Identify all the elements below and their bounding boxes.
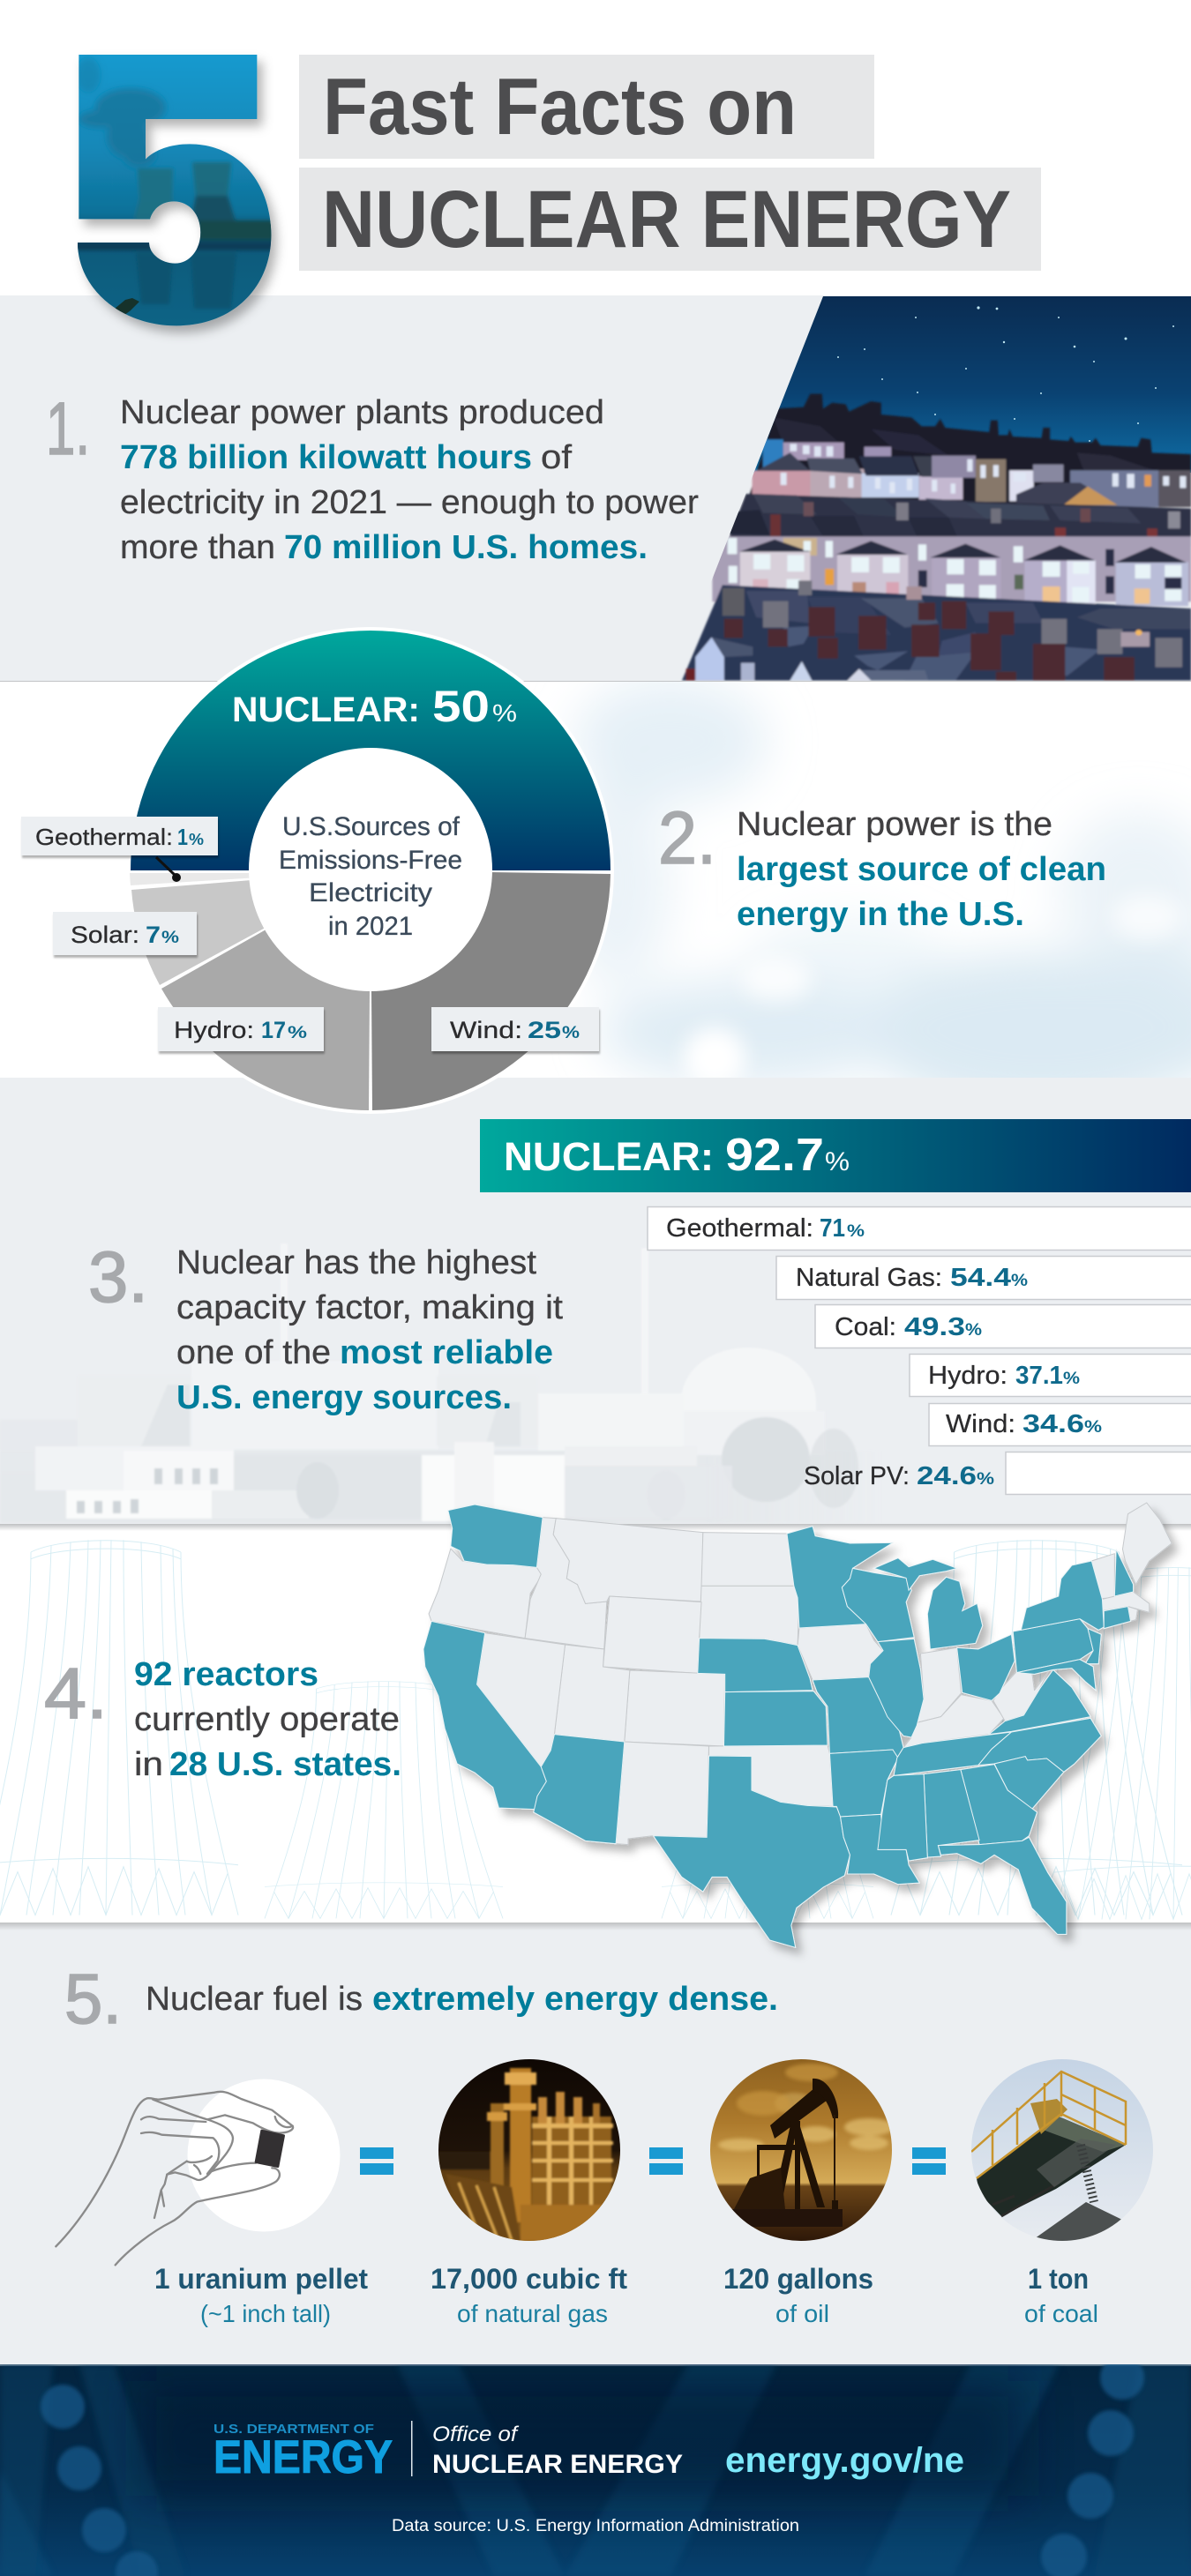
bar: wind: % xyxy=(1084,1418,1102,1437)
bar: hydro: Hydro: xyxy=(928,1362,1007,1390)
bar: natural gas xyxy=(776,1256,1191,1300)
donut centre label: Emissions-Free xyxy=(279,846,462,875)
states with operating reactors xyxy=(423,1505,1134,1947)
donut centre label: U.S.Sources of xyxy=(282,812,461,841)
fact 1 body: 778 billion kilowatt hours xyxy=(120,439,532,476)
bar: geothermal: % xyxy=(847,1222,865,1241)
bar: coal xyxy=(815,1305,1191,1348)
label: wind: 25 xyxy=(528,1017,561,1043)
equals sign 2 xyxy=(649,2147,683,2175)
bar: hydro: % xyxy=(1063,1370,1080,1388)
label: geothermal: Geothermal: xyxy=(35,824,173,850)
section divider shadow xyxy=(0,1923,1191,1930)
bar: solar PV xyxy=(804,1452,1191,1494)
nuclear label: 50 xyxy=(432,682,490,731)
label: geothermal xyxy=(21,817,218,855)
caption: coal xyxy=(1024,2263,1098,2327)
fact 5 heading: Nuclear fuel is xyxy=(146,1981,363,2018)
label: solar: Solar: xyxy=(71,922,139,948)
nuclear label xyxy=(232,682,517,731)
nuclear label: NUCLEAR: xyxy=(232,691,420,729)
slice: wind 25 percent xyxy=(371,870,610,1110)
bar: geothermal: 71 xyxy=(820,1214,845,1243)
states without reactors xyxy=(429,1503,1172,1845)
logo: Office of Nuclear Energy: Office of xyxy=(432,2423,519,2446)
logo: Office of Nuclear Energy: NUCLEAR ENERGY xyxy=(432,2450,683,2479)
label: geothermal: % xyxy=(189,831,204,848)
logo: Office of Nuclear Energy xyxy=(432,2423,683,2479)
photo: oil pump jack xyxy=(710,2059,894,2241)
label: solar: % xyxy=(161,929,179,947)
panel: title block xyxy=(299,55,1041,271)
fact 5 heading xyxy=(146,1981,778,2018)
fact 3 body: one of the xyxy=(176,1334,331,1371)
bar: wind: 34.6 xyxy=(1022,1410,1084,1438)
panel: fact 2 text xyxy=(658,796,1106,933)
footer xyxy=(0,2356,1191,2576)
label: solar: 7 xyxy=(146,922,161,948)
label: geothermal: 1 xyxy=(177,824,188,850)
bar: coal: Coal: xyxy=(835,1313,896,1341)
panel: fact 4 background with cooling tower wireframes xyxy=(0,1525,1191,1923)
bar: natural gas: 54.4 xyxy=(950,1264,1011,1292)
caption: coal: 1 ton xyxy=(1028,2263,1089,2295)
fact 1 body: of xyxy=(541,439,572,476)
fact 4 body: currently operate xyxy=(134,1701,400,1738)
outer ring edge xyxy=(127,627,614,1114)
label: hydro: % xyxy=(288,1024,307,1042)
caption: natural gas xyxy=(431,2263,627,2327)
label: hydro xyxy=(158,1007,324,1051)
slice: nuclear 50 percent xyxy=(131,631,610,870)
slice: solar 7 percent xyxy=(131,870,371,985)
slice: hydro 17 percent xyxy=(161,870,371,1110)
donut centre label: in 2021 xyxy=(328,912,413,941)
bar: coal: 49.3 xyxy=(904,1313,965,1341)
bar: hydro: 37.1 xyxy=(1015,1362,1063,1390)
panel: fact 5 xyxy=(56,1960,1153,2327)
label: wind: % xyxy=(562,1024,580,1042)
fact 5 heading: extremely energy dense. xyxy=(372,1981,778,2018)
panel: fact 3 background xyxy=(0,1078,1191,1527)
slice: geothermal 1 percent xyxy=(130,870,371,885)
fact 1 body: 70 million U.S. homes. xyxy=(284,529,648,566)
bar: nuclear xyxy=(480,1119,1191,1192)
fact 1 body: Nuclear power plants produced xyxy=(120,394,604,431)
numeral 4: 4. xyxy=(44,1654,108,1734)
section divider shadow xyxy=(0,1078,1191,1086)
title: Nuclear Energy: NUCLEAR ENERGY xyxy=(322,175,1011,265)
big numeral 5 with cooling tower photo xyxy=(71,49,300,331)
label: hydro: Hydro: xyxy=(174,1017,254,1043)
geothermal leader line xyxy=(156,857,181,882)
logo: U.S. Department of Energy: U.S. DEPARTMENT OF xyxy=(213,2422,374,2437)
faded nuclear plant photo xyxy=(0,1243,882,1523)
fact 3 body xyxy=(176,1244,563,1416)
title: Fast Facts on: Fast Facts on xyxy=(323,63,797,152)
caption: uranium pellet: 1 uranium pellet xyxy=(154,2263,368,2295)
bar: coal: % xyxy=(965,1321,982,1340)
bar: nuclear: % xyxy=(825,1147,850,1176)
numeral 2: 2. xyxy=(658,796,716,879)
bar: hydro xyxy=(910,1355,1191,1397)
caption: oil: of oil xyxy=(775,2300,829,2327)
bar: natural gas: % xyxy=(1011,1272,1028,1290)
fact 2 body: Nuclear power is the xyxy=(737,806,1052,843)
numeral 1: 1. xyxy=(46,387,90,470)
fact 4 body: 92 reactors xyxy=(134,1656,318,1693)
panel: fact 2 background with clouds xyxy=(0,679,1191,1111)
equals sign 3 xyxy=(912,2147,946,2175)
logo: U.S. Department of Energy: ENERGY xyxy=(213,2431,393,2483)
panel: fact 5 background xyxy=(0,1923,1191,2364)
bar: geothermal: Geothermal: xyxy=(666,1214,813,1243)
map: US states with operating reactors xyxy=(423,1503,1172,1947)
fact 1 body xyxy=(120,394,699,566)
nuclear label: % xyxy=(492,699,517,727)
panel: fact 4 text xyxy=(44,1654,401,1783)
panel: fact 3 text xyxy=(88,1237,563,1416)
data source: Data source: U.S. Energy Information Administration xyxy=(392,2517,799,2535)
bar: natural gas: Natural Gas: xyxy=(796,1264,942,1292)
label: wind xyxy=(431,1007,599,1051)
donut centre label xyxy=(249,748,492,991)
logo divider xyxy=(411,2421,413,2476)
bar: solar PV: 24.6 xyxy=(917,1462,977,1490)
label: solar xyxy=(53,912,197,955)
bar: wind: Wind: xyxy=(946,1410,1015,1438)
fact 2 body xyxy=(737,806,1106,933)
fact 3 body: capacity factor, making it xyxy=(176,1289,563,1326)
fact 4 body xyxy=(134,1656,401,1783)
panel: fact 1 background xyxy=(0,295,1191,682)
caption: uranium pellet: (~1 inch tall) xyxy=(200,2300,331,2327)
caption: coal: of coal xyxy=(1024,2300,1098,2327)
numeral 5 small: 5. xyxy=(64,1960,122,2038)
photo: natural gas plant xyxy=(438,2059,620,2241)
fact 4 body: 28 U.S. states. xyxy=(169,1746,401,1783)
bar: geothermal xyxy=(648,1206,1191,1251)
caption: oil: 120 gallons xyxy=(723,2263,873,2295)
footer background xyxy=(0,2356,1191,2576)
fact 1 body: electricity in 2021 — enough to power xyxy=(120,484,699,521)
bar: nuclear: 92.7 xyxy=(725,1130,824,1181)
bar chart: capacity factor xyxy=(480,1119,1191,1494)
donut chart: sources of emissions-free electricity xyxy=(21,627,614,1114)
caption: uranium pellet xyxy=(154,2263,368,2327)
numeral 3: 3. xyxy=(88,1237,148,1318)
panel: fact 1 text xyxy=(46,387,699,566)
bar: nuclear: NUCLEAR: xyxy=(504,1134,714,1179)
bar: solar PV: % xyxy=(977,1470,994,1489)
caption: natural gas: of natural gas xyxy=(457,2300,608,2327)
donut centre label: Electricity xyxy=(309,878,432,907)
fact 3 body: U.S. energy sources. xyxy=(176,1379,512,1416)
equals sign 1 xyxy=(360,2147,393,2175)
label: wind: Wind: xyxy=(450,1017,522,1043)
fact 2 body: energy in the U.S. xyxy=(737,896,1024,933)
caption: natural gas: 17,000 cubic ft xyxy=(431,2263,627,2295)
icon: hand holding uranium pellet xyxy=(56,2079,340,2265)
fact 3 body: Nuclear has the highest xyxy=(176,1244,536,1281)
section divider shadow xyxy=(0,681,1191,689)
fact 2 body: largest source of clean xyxy=(737,851,1106,888)
fact 4 body: in xyxy=(134,1746,163,1783)
photo: coal conveyor xyxy=(971,2059,1153,2241)
photo: row houses at night xyxy=(670,296,1191,681)
bar: wind xyxy=(929,1404,1191,1446)
caption: oil xyxy=(723,2263,873,2327)
website: energy.gov/ne xyxy=(725,2441,964,2480)
section divider shadow xyxy=(0,1524,1191,1531)
fact 1 body: more than xyxy=(120,529,275,566)
bar: solar PV: Solar PV: xyxy=(804,1462,910,1490)
label: hydro: 17 xyxy=(261,1017,286,1043)
fact 3 body: most reliable xyxy=(340,1334,553,1371)
